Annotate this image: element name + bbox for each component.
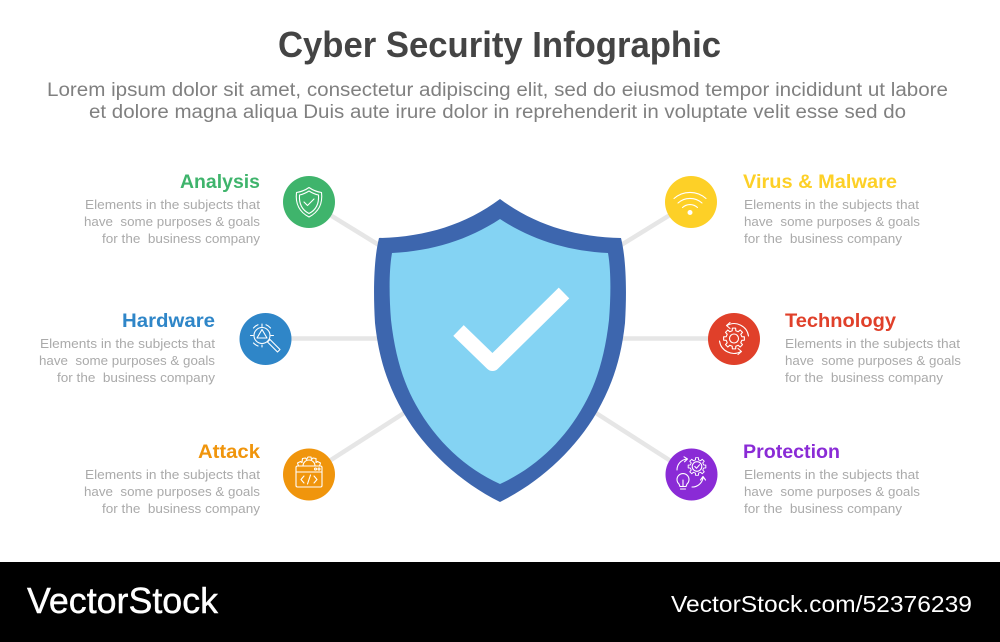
- description: Virus & Malware: for the business company: [744, 231, 903, 246]
- description: Technology: have some purposes & goals: [785, 353, 961, 368]
- subtitle text block: et dolore magna aliqua Duis aute irure dolor in reprehenderit in voluptate velit esse sed do: [89, 102, 906, 123]
- central shield with check mark: [374, 199, 626, 502]
- icon: code window with gear: [283, 448, 335, 500]
- item: Hardware: [39, 310, 292, 385]
- icon: gear, bulb and arrows: [666, 448, 718, 500]
- heading: Protection: Protection: [743, 441, 840, 463]
- description: Hardware: Elements in the subjects that: [40, 336, 215, 351]
- item: Protection: [666, 441, 920, 516]
- footer url: VectorStock.com/52376239: [671, 591, 972, 617]
- description: Protection: Elements in the subjects that: [744, 467, 919, 482]
- description: Protection: have some purposes & goals: [744, 484, 920, 499]
- description: Attack: for the business company: [102, 501, 261, 516]
- item: Technology: [708, 310, 961, 385]
- heading: Virus & Malware: Virus & Malware: [743, 171, 897, 193]
- item: Analysis: [84, 171, 335, 246]
- description: Protection: for the business company: [744, 501, 903, 516]
- heading: Technology: Technology: [785, 310, 896, 332]
- footer band: [0, 562, 1000, 642]
- icon: magnifier with warning triangle: [240, 313, 292, 365]
- description: Attack: [84, 467, 261, 516]
- footer logo: VectorStock: [27, 580, 219, 621]
- connector lines: [265, 202, 734, 474]
- description: Attack: Elements in the subjects that: [85, 467, 260, 482]
- item: Virus & Malware: [665, 171, 920, 246]
- subtitle text block: [47, 80, 948, 123]
- description: Virus & Malware: [744, 197, 920, 246]
- description: Attack: have some purposes & goals: [84, 484, 260, 499]
- description: Technology: Elements in the subjects that: [785, 336, 960, 351]
- heading: Attack: Attack: [198, 441, 260, 463]
- description: Analysis: have some purposes & goals: [84, 214, 260, 229]
- check mark: [458, 293, 564, 364]
- shield outer border: [374, 199, 626, 502]
- item: Attack: [84, 441, 335, 516]
- description: Analysis: for the business company: [102, 231, 261, 246]
- icon: wifi: [665, 176, 717, 228]
- description: Technology: for the business company: [785, 370, 944, 385]
- description: Analysis: [84, 197, 261, 246]
- icon: shield: [283, 176, 335, 228]
- subtitle text block: Lorem ipsum dolor sit amet, consectetur adipiscing elit, sed do eiusmod tempor incididunt ut labore: [47, 80, 948, 101]
- icon: gear with cycle arrows: [708, 313, 760, 365]
- description: Virus & Malware: Elements in the subjects that: [744, 197, 919, 212]
- heading: Hardware: Hardware: [122, 310, 215, 332]
- description: Virus & Malware: have some purposes & goals: [744, 214, 920, 229]
- description: Protection: [744, 467, 920, 516]
- description: Hardware: have some purposes & goals: [39, 353, 215, 368]
- title: Cyber Security Infographic: [278, 24, 721, 65]
- shield inner fill: [390, 219, 610, 484]
- description: Hardware: [39, 336, 216, 385]
- description: Analysis: Elements in the subjects that: [85, 197, 260, 212]
- description: Hardware: for the business company: [57, 370, 216, 385]
- description: Technology: [785, 336, 961, 385]
- heading: Analysis: Analysis: [180, 171, 260, 193]
